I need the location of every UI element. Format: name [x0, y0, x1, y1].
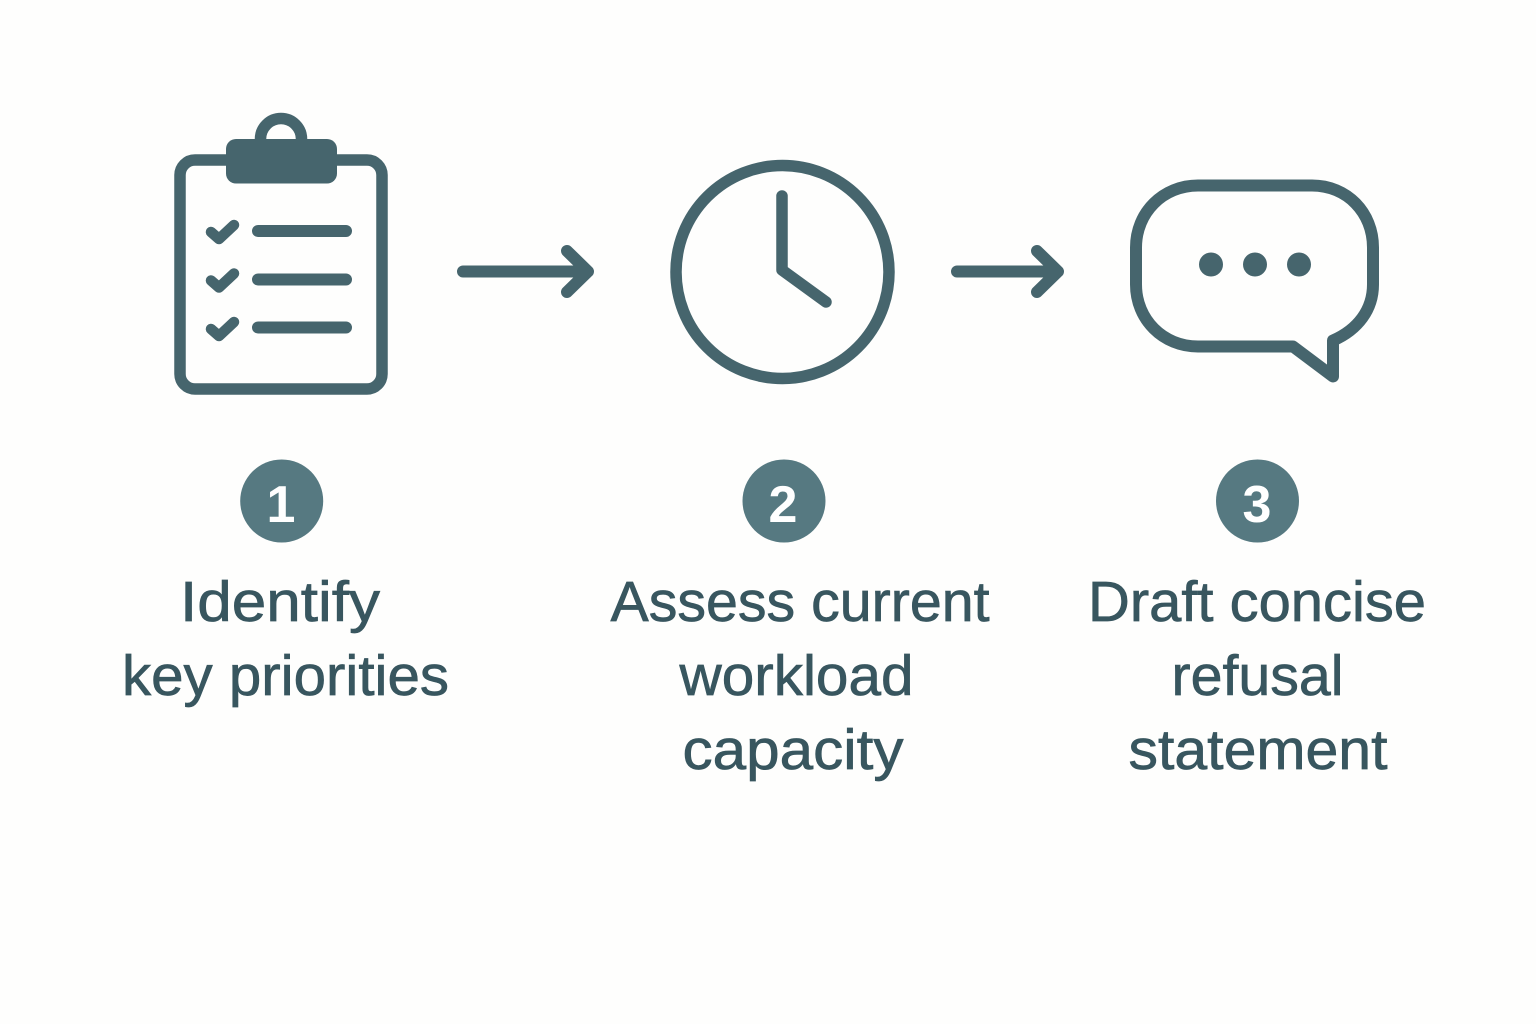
- number badge 1: [240, 460, 323, 542]
- number badge 2: [742, 460, 826, 542]
- label: step three: Draft concise: [1088, 570, 1426, 634]
- arrow: step one to step two: [463, 251, 588, 292]
- label: step three: statement: [1128, 718, 1388, 782]
- label: step three: [1088, 570, 1426, 782]
- label: step two: Assess current: [610, 570, 990, 634]
- label: step one: Identify: [180, 570, 381, 634]
- icon: clipboard checklist: [180, 118, 382, 389]
- icon: clock: [676, 166, 889, 378]
- number badge 2: 2: [769, 476, 797, 534]
- arrow: step two to step three: [957, 251, 1058, 292]
- icon: speech bubble: [1136, 186, 1373, 376]
- label: step two: [610, 570, 990, 782]
- label: step three: refusal: [1172, 644, 1344, 708]
- label: step one: key priorities: [122, 644, 449, 708]
- label: step two: capacity: [682, 718, 904, 782]
- label: step two: workload: [678, 644, 914, 708]
- number badge 3: [1216, 460, 1299, 542]
- number badge 1: 1: [267, 476, 295, 534]
- label: step one: [122, 570, 449, 708]
- number badge 3: 3: [1243, 476, 1271, 534]
